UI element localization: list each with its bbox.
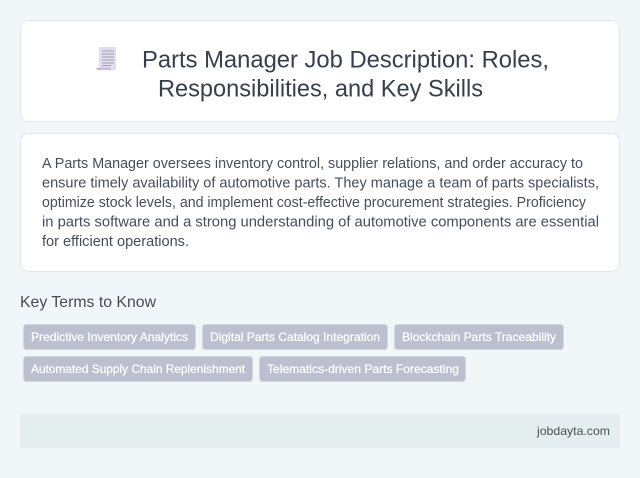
tag: automated supply chain replenishment: Automated Supply Chain Replenishment [31, 362, 246, 376]
text block: description: optimize stock levels, and implement cost-effective procurement strategies. Proficiency [42, 195, 587, 211]
text block: description: in parts software and a strong understanding of automotive components are essential [42, 214, 599, 230]
footer: site name: jobdayta.com [536, 424, 610, 438]
text block: description: ensure timely availability of automotive parts. They manage a team of parts specialists, [42, 176, 599, 192]
icon: parts document [96, 47, 116, 70]
footer bar [20, 414, 620, 448]
panel: description card [20, 134, 620, 272]
heading: title: Responsibilities, and Key Skills [158, 76, 483, 102]
heading: title [142, 46, 549, 102]
heading: key terms: Key Terms to Know [20, 294, 156, 311]
tag: automated supply chain replenishment [24, 356, 252, 382]
text block: description: for efficient operations. [42, 234, 189, 250]
tag: predictive inventory analytics: Predictive Inventory Analytics [31, 330, 188, 344]
text block: description: A Parts Manager oversees inventory control, supplier relations, and order accuracy to [42, 156, 583, 172]
tag: telematics-driven parts forecasting [260, 356, 466, 382]
heading: title: Parts Manager Job Description: Roles, [142, 46, 549, 74]
tag: digital parts catalog integration [202, 324, 388, 350]
tag: blockchain parts traceability: Blockchain Parts Traceability [402, 330, 556, 344]
tag: digital parts catalog integration: Digital Parts Catalog Integration [210, 330, 380, 344]
tag: predictive inventory analytics [24, 324, 196, 350]
panel: title card [20, 20, 620, 122]
tag: blockchain parts traceability [394, 324, 564, 350]
text block: description [42, 156, 599, 250]
tag: telematics-driven parts forecasting: Telematics-driven Parts Forecasting [267, 362, 459, 376]
